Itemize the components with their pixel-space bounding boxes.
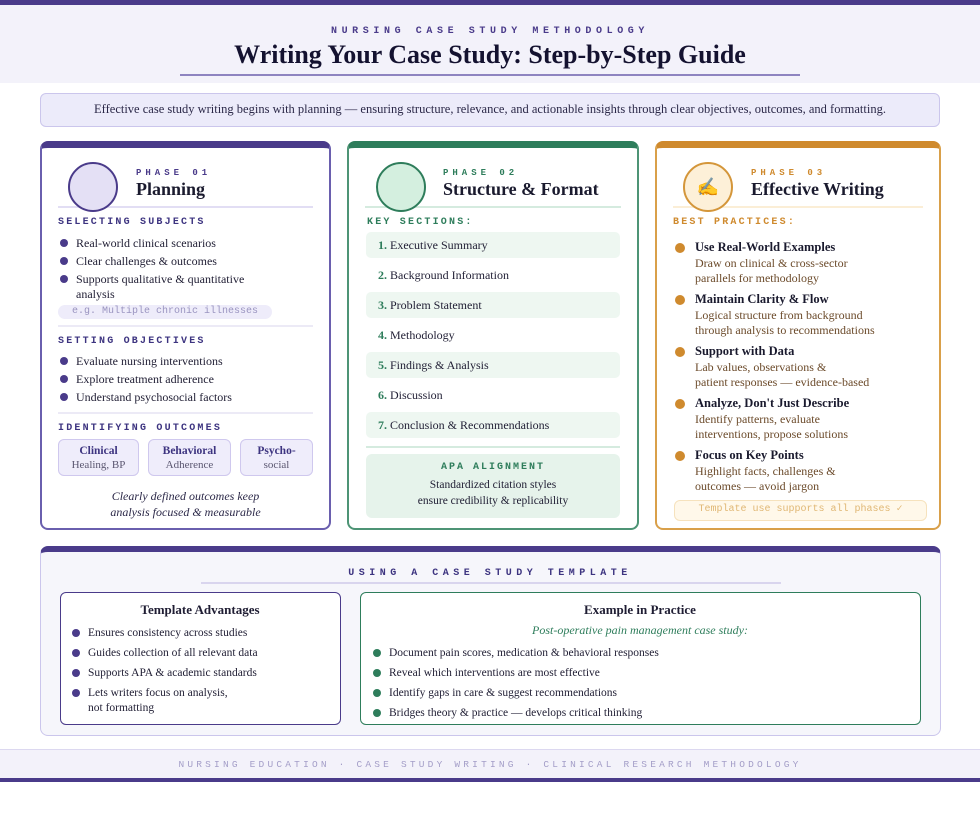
icon: circle [376,162,426,212]
panel: phase 1 planning: Understand psychosocial factors [76,390,232,404]
practices list: Analyze, Don't Just Describe [695,396,849,410]
callout: APA [366,454,620,518]
practices list: Highlight facts, challenges & [695,464,836,478]
title: Writing Your Case Study: Step-by-Step Guide [234,40,746,69]
box: template advantages: Supports APA & academic standards [88,667,257,679]
section list: 6. Discussion [378,388,443,402]
heading: Planning [136,179,205,199]
practices list: Lab values, observations & [695,360,826,374]
practices list: Maintain Clarity & Flow [695,292,829,306]
footer: NURSING EDUCATION · CASE STUDY WRITING · CLINICAL RESEARCH METHODOLOGY [178,759,802,770]
footer [0,749,980,778]
panel: phase 1 planning: Supports qualitative & quantitative [76,272,244,286]
icon: pen: ✍ [697,177,719,197]
italic note: Clearly defined outcomes keep [112,489,259,503]
panel: phase 1 planning: Psycho- [257,445,296,457]
practices list: through analysis to recommendations [695,323,875,337]
practices list: Draw on clinical & cross-sector [695,256,848,270]
practices list: Use Real-World Examples [695,240,835,254]
footer pill: Template use supports all phases ✓ [698,504,903,515]
box: example in practice: Bridges theory & practice — develops critical thinking [389,707,642,719]
practices list: Logical structure from background [695,308,863,322]
panel: phase 2 structure [347,141,639,530]
panel: phase 1 planning: Clear challenges & outcomes [76,254,217,268]
practices list: patient responses — evidence-based [695,375,869,389]
heading: Effective Writing [751,179,884,199]
practices list: outcomes — avoid jargon [695,479,819,493]
panel: template section [40,546,941,736]
box: template advantages: Lets writers focus on analysis, [88,687,228,699]
panel: phase 3 writing [655,141,941,530]
box: template advantages: not formatting [88,702,154,714]
panel: phase 1 planning: Clinical [79,445,118,457]
section: identifying outcomes: IDENTIFYING OUTCOMES [58,423,222,434]
icon: circle [68,162,118,212]
intro box [40,93,940,127]
panel: phase 1 planning: Behavioral [163,445,216,457]
section: setting objectives: SETTING OBJECTIVES [58,336,206,347]
footer pill [674,500,927,521]
practices list: Focus on Key Points [695,448,804,462]
panel: phase 1 planning: PHASE 01 [136,168,211,178]
practices list: Support with Data [695,344,794,358]
example pill [58,305,272,319]
section: selecting subjects: SELECTING SUBJECTS [58,217,206,228]
section list: 7. Conclusion & Recommendations [378,418,549,432]
intro box: Effective case study writing begins with planning — ensuring structure, relevance, and actionable insights through clear objectives, outcomes, and formatting. [94,102,886,116]
box: template advantages: Guides collection of all relevant data [88,647,258,659]
box: example in practice: Reveal which interventions are most effective [389,667,600,679]
header band [0,5,980,83]
panel: phase 1 planning: analysis [76,287,115,301]
italic note: analysis focused & measurable [110,505,261,519]
panel: phase 1 planning [40,141,331,530]
section list: 5. Findings & Analysis [378,358,489,372]
practices list [675,240,875,493]
box: example in practice: Example in Practice [584,602,696,617]
callout: APA: ensure credibility & replicability [418,495,568,507]
section list: 1. Executive Summary [378,238,488,252]
italic note [110,489,261,519]
panel: phase 3 writing: BEST PRACTICES: [673,217,796,228]
panel: phase 2 structure: PHASE 02 [443,168,518,178]
box: template advantages [60,592,341,725]
subtitle: NURSING CASE STUDY METHODOLOGY [331,26,649,37]
practices list: interventions, propose solutions [695,427,848,441]
panel: phase 1 planning: Evaluate nursing interventions [76,354,223,368]
panel: phase 3 writing: PHASE 03 [751,168,826,178]
box: template advantages: Ensures consistency across studies [88,627,247,639]
section heading: USING A CASE STUDY TEMPLATE [348,568,632,579]
box: template advantages: Template Advantages [140,602,260,617]
panel: phase 1 planning: Healing, BP [72,459,125,471]
section list: 4. Methodology [378,328,455,342]
box: example in practice: Document pain scores, medication & behavioral responses [389,647,659,659]
icon: pen [683,162,733,212]
callout: APA: APA ALIGNMENT [441,462,545,473]
section list [366,232,620,438]
callout: APA: Standardized citation styles [430,479,556,491]
box: example in practice [360,592,921,725]
practices list: Identify patterns, evaluate [695,412,820,426]
heading: Structure & Format [443,179,599,199]
box: example in practice: Post-operative pain management case study: [532,623,748,637]
box: example in practice: Identify gaps in care & suggest recommendations [389,687,617,699]
panel: phase 2 structure: KEY SECTIONS: [367,217,474,228]
panel: phase 1 planning: Real-world clinical scenarios [76,236,216,250]
example pill: e.g. Multiple chronic illnesses [72,306,258,317]
practices list: parallels for methodology [695,271,819,285]
section list: 2. Background Information [378,268,509,282]
top bar [0,0,980,5]
panel: phase 1 planning: social [264,459,289,471]
panel: phase 1 planning: Adherence [166,459,213,471]
section list: 3. Problem Statement [378,298,482,312]
panel: phase 1 planning: Explore treatment adherence [76,372,214,386]
